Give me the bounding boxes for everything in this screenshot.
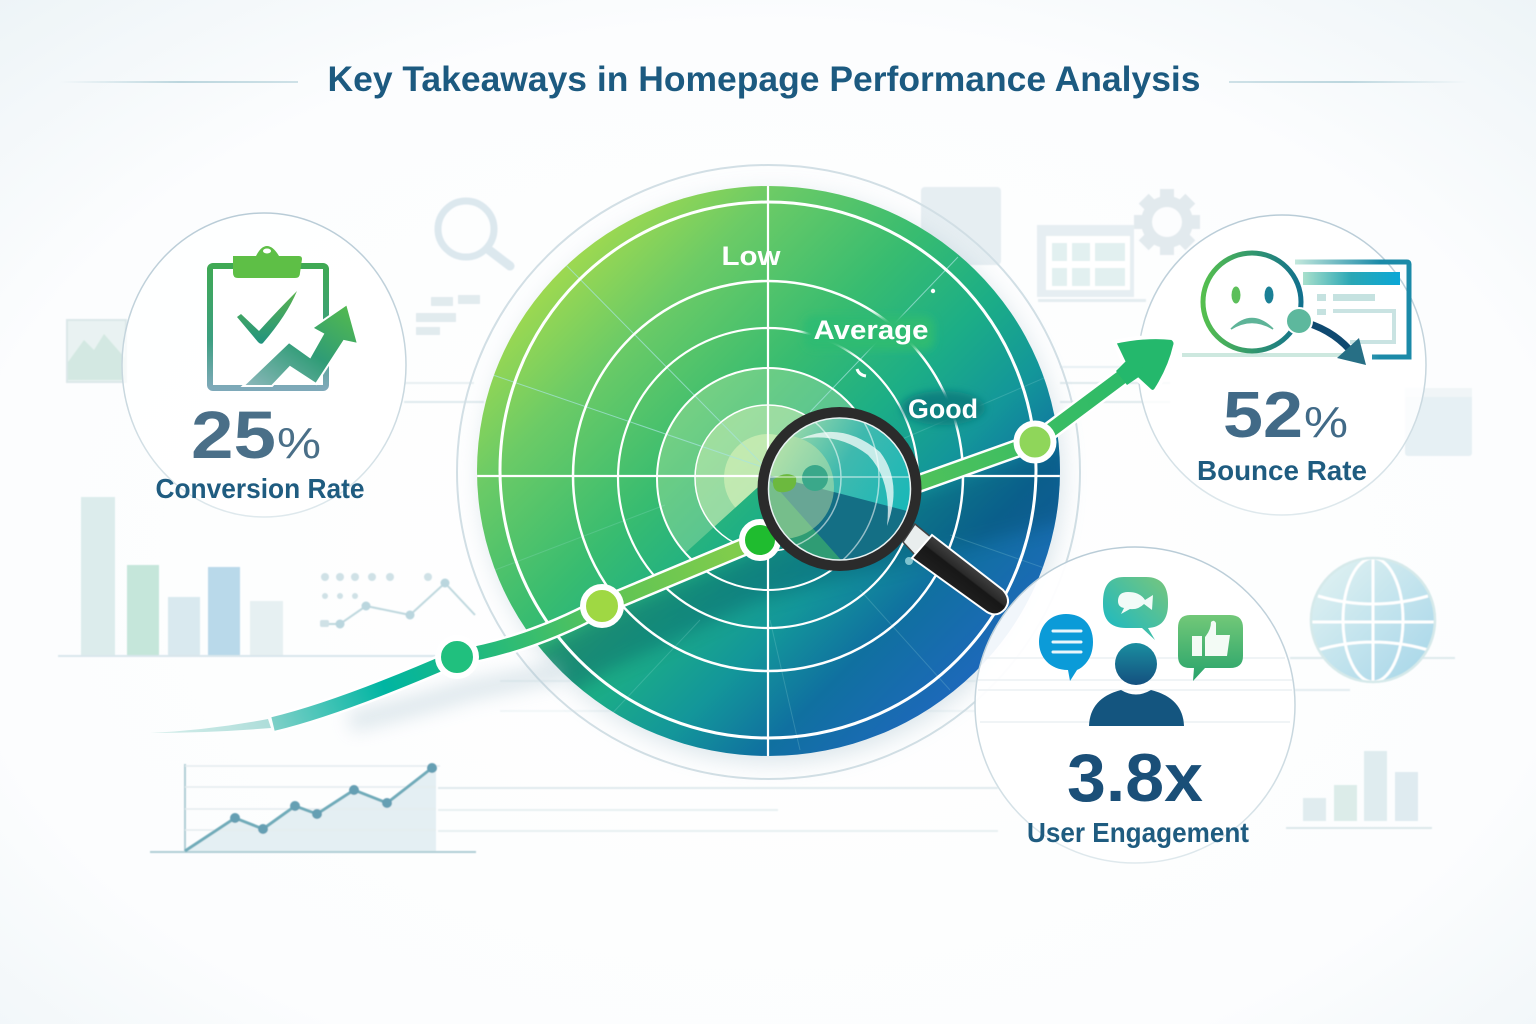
trend line body [273, 371, 1130, 724]
bar chart: faint left [58, 497, 488, 657]
dark band beneath trend line [530, 440, 1070, 700]
stat: 52%: 52 [1223, 378, 1303, 451]
faint window card [1405, 388, 1472, 456]
faint horizontal rules [404, 366, 1455, 832]
gauge label backdrop: Good [901, 391, 985, 425]
icon: thumbs up bubble [1178, 615, 1243, 681]
icon: sad face [1203, 253, 1301, 351]
radar gauge [457, 165, 1080, 779]
trend line tail [150, 719, 271, 733]
radar outer ring [457, 165, 1080, 779]
radar disc [470, 180, 1070, 760]
magnifier handle [912, 535, 1008, 614]
arrowhead [1114, 337, 1176, 392]
title: Key Takeaways in Homepage Performance Analysis [328, 60, 1200, 99]
label: bounce rate: Bounce Rate [1197, 455, 1367, 486]
icon: message bubble [1039, 614, 1093, 681]
icon: globe [1310, 557, 1436, 683]
gauge label backdrop: Average [804, 316, 934, 350]
title rule left [60, 81, 298, 83]
panel: user engagement [975, 547, 1295, 863]
icon: faint magnifier [438, 201, 510, 266]
marker [1016, 424, 1054, 460]
panel: conversion rate [122, 213, 406, 517]
magnifying glass [758, 407, 1010, 616]
gauge label: Low: Low [722, 241, 782, 271]
trend line shadow [350, 672, 560, 722]
faint rules inside panel [978, 658, 1292, 722]
title rule right [1229, 81, 1467, 83]
background decorative charts and icons [58, 187, 1472, 852]
icon: rising arrow [243, 304, 358, 386]
panel: bounce rate [1138, 215, 1426, 515]
icon: faint gear [1134, 189, 1200, 255]
small speck [931, 289, 935, 293]
line chart: lower left [150, 763, 476, 852]
radar soft shadow [482, 194, 1062, 762]
icon: page window [1182, 262, 1409, 357]
icon: faint table [1037, 225, 1146, 302]
icon: clipboard [210, 246, 326, 388]
trend line with arrow [150, 337, 1176, 733]
icon: downward arrow [1286, 308, 1366, 365]
stat unit: percent: % [1304, 398, 1348, 447]
gauge label: Good: Good [908, 394, 978, 424]
icon: faint picture card [67, 320, 126, 382]
stat: 3.8x: 3.8x [1067, 740, 1203, 816]
lens [769, 418, 910, 560]
gauge label: Average: Average [814, 315, 928, 345]
lens inner rim [768, 418, 910, 560]
stat unit: percent: % [277, 419, 321, 468]
lens rim [763, 412, 916, 566]
shaft join [1116, 355, 1146, 385]
icon: check mark [237, 291, 297, 344]
marker [438, 638, 476, 676]
stat: 25%: 25 [191, 398, 276, 473]
label: user engagement: User Engagement [1027, 817, 1249, 848]
label: conversion rate: Conversion Rate [156, 473, 364, 504]
icon: video chat bubble [1103, 577, 1168, 640]
icon: person [1089, 643, 1184, 726]
line chart: faint dots [320, 573, 475, 628]
faint gantt bars [416, 295, 480, 335]
trend line white edge [273, 371, 1130, 724]
magnifier neck [903, 524, 932, 556]
faint page card top [921, 187, 1001, 265]
small speck [857, 369, 866, 376]
lens flare speck [905, 557, 913, 565]
marker [583, 587, 621, 625]
bar chart: faint right [1286, 751, 1432, 829]
marker [742, 522, 778, 558]
